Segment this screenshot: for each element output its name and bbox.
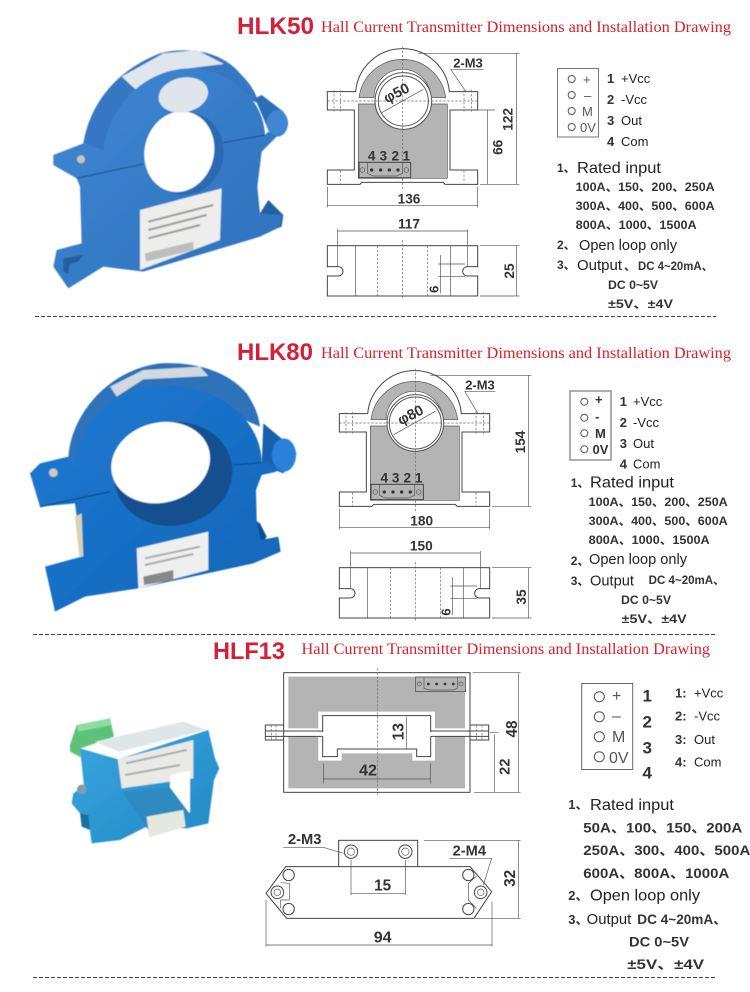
panel: HLK80: [30, 339, 731, 626]
spec text: HLF13: 3、: [568, 912, 589, 927]
spec text: HLK50: [557, 160, 715, 311]
pin list: HLK50: -Vcc: [621, 92, 648, 107]
spec text: HLK80: 100A、150、200、250A: [589, 495, 728, 509]
spec text: HLK50: 800A、1000、1500A: [576, 218, 697, 232]
drawing: HLK50 front and side views: 122: [500, 108, 515, 131]
heading: HLK50 subtitle: Hall Current Transmitter Dimensions and Installation Drawing: [321, 19, 731, 36]
drawing: HLK80 front and side views: 2: [404, 470, 412, 485]
pin box: HLK50: –: [584, 88, 592, 103]
pin list: HLF13: [675, 686, 724, 770]
heading: HLF13 model: HLF13: [213, 638, 285, 665]
pin box: HLK50: 0V: [580, 120, 596, 135]
drawing: HLK80 front and side views: 3: [392, 470, 400, 485]
pin box: HLK80: [570, 391, 611, 460]
drawing: HLF13 front and mounting views: 22: [497, 759, 513, 775]
drawing: HLK50 front and side views: 3: [380, 148, 388, 163]
pin list: HLF13: Com: [694, 755, 721, 770]
drawing: HLK50 front and side views: 1: [403, 148, 411, 163]
pin list: HLF13: 2:: [675, 709, 687, 724]
heading: HLK80 subtitle: Hall Current Transmitter Dimensions and Installation Drawing: [321, 345, 731, 362]
pin list: HLK50: 1: [607, 71, 614, 86]
spec text: HLF13: Output: [587, 912, 631, 928]
drawing: HLK50 front and side views: 117: [398, 217, 420, 232]
pin list: HLK50: 3: [607, 113, 614, 128]
spec text: HLK50: 300A、400、500、600A: [576, 199, 715, 213]
pin list: HLK80: 2: [620, 415, 627, 430]
drawing: HLK80 front and side views: 150: [410, 539, 433, 554]
pin list: HLK80: 1: [620, 394, 627, 409]
drawing: HLK50 front and side views: 136: [398, 192, 421, 207]
pin list: HLK50: 4: [607, 134, 615, 149]
drawing: HLK50 front and side views: 4: [368, 148, 376, 163]
spec text: HLK80: 3、: [571, 574, 589, 588]
spec text: HLK80: DC 4~20mA、: [649, 575, 725, 587]
pin list: HLF13: 3:: [675, 732, 687, 747]
panel: HLF13: [70, 638, 750, 972]
pin box: HLK80: 0V: [592, 442, 609, 457]
pin list: HLK80: -Vcc: [633, 415, 660, 430]
drawing: HLF13 front and mounting views: 42: [359, 763, 377, 780]
spec text: HLK50: 100A、150、200、250A: [576, 180, 715, 194]
drawing: HLF13 front and mounting views: [265, 668, 521, 947]
drawing: HLK50 front and side views: 2-M3: [453, 56, 483, 71]
heading: HLK50 model: HLK50: [237, 13, 314, 40]
spec text: HLK50: Rated input: [577, 160, 662, 177]
drawing: HLK50 front and side views: 2: [392, 148, 400, 163]
pin list: HLK80: +Vcc: [633, 394, 663, 409]
pin box: HLK80: +: [595, 392, 603, 407]
pin box: HLK80: -: [595, 409, 599, 424]
heading: HLK80 model: HLK80: [237, 339, 313, 366]
pin box: HLK50: M: [582, 104, 593, 119]
drawing: HLK80 front and side views: [339, 369, 531, 622]
drawing: HLK80 front and side views: 1: [415, 470, 423, 485]
pin list: HLK80: [620, 394, 663, 472]
spec text: HLK50: Output: [577, 257, 623, 274]
drawing: HLF13 front and mounting views: 32: [502, 870, 519, 887]
spec text: HLF13: ±5V、±4V: [627, 956, 705, 972]
drawing: HLK50 front and side views: 25: [502, 263, 517, 279]
drawing: HLK80 front and side views: 180: [410, 514, 433, 529]
drawing: HLK80 front and side views: 6: [438, 608, 453, 616]
pin list: HLF13: Out: [694, 732, 715, 747]
pin numbers: HLF13: 2: [642, 712, 652, 731]
spec text: HLF13: DC 4~20mA、: [637, 912, 727, 927]
spec text: HLF13: Rated input: [590, 797, 675, 814]
spec text: HLK80: 1、: [571, 476, 589, 490]
pin box: HLK50: +: [583, 72, 591, 87]
pin box: HLK80: M: [595, 426, 606, 441]
pin numbers: HLF13: 3: [642, 738, 652, 757]
pin list: HLK80: 3: [620, 436, 627, 451]
spec text: HLK50: DC 0~5V: [608, 280, 658, 292]
drawing: HLK50 front and side views: φ50: [381, 81, 412, 107]
spec text: HLK80: Output: [590, 573, 635, 590]
pin list: HLK50: 2: [607, 92, 614, 107]
pin list: HLK50: Out: [621, 113, 642, 128]
pin numbers: HLF13: [642, 687, 652, 782]
spec text: HLK50: 1、: [557, 161, 576, 175]
pin box: HLF13: 0V: [609, 750, 629, 767]
pin box: HLK50: [558, 68, 598, 137]
drawing: HLK80 front and side views: 4: [381, 470, 389, 485]
spec text: HLK50: 、: [624, 259, 636, 273]
pin list: HLK80: Out: [633, 436, 654, 451]
pin list: HLK50: +Vcc: [621, 71, 651, 86]
spec text: HLK50: DC 4~20mA、: [638, 261, 713, 273]
pin list: HLF13: +Vcc: [694, 686, 724, 700]
panel: HLK50: [53, 13, 731, 311]
spec text: HLK50: ±5V、±4V: [608, 297, 673, 311]
spec text: HLK80: Open loop only: [589, 552, 688, 568]
drawing: HLK80 front and side views: 2-M3: [465, 378, 495, 393]
pin box: HLF13: M: [612, 729, 625, 746]
pin list: HLK50: Com: [621, 134, 648, 149]
spec text: HLK80: 300A、400、500、600A: [589, 514, 728, 528]
spec text: HLK50: 3、: [557, 258, 576, 272]
pin list: HLF13: 1:: [675, 686, 687, 700]
drawing: HLK50 front and side views: [327, 47, 519, 300]
drawing: HLK80 front and side views: 154: [513, 430, 528, 453]
photo: HLF13 transmitter: [70, 718, 219, 843]
pin list: HLF13: 4:: [675, 755, 687, 770]
spec text: HLF13: Open loop only: [590, 888, 700, 905]
spec text: HLF13: [568, 797, 750, 972]
spec text: HLK80: 800A、1000、1500A: [589, 533, 710, 547]
drawing: HLF13 front and mounting views: 2-M3: [288, 832, 321, 848]
drawing: HLF13 front and mounting views: 94: [374, 929, 392, 946]
spec text: HLK50: 2、: [557, 238, 576, 252]
spec text: HLF13: 1、: [568, 797, 589, 812]
pin list: HLF13: -Vcc: [694, 709, 720, 724]
pin box: HLF13: –: [612, 708, 621, 725]
drawing: HLF13 front and mounting views: 15: [374, 878, 392, 895]
drawing: HLK80 front and side views: φ80: [395, 403, 426, 429]
pin list: HLK50: [607, 71, 651, 149]
pin box: HLF13: [582, 684, 633, 770]
spec text: HLF13: 2、: [568, 888, 589, 903]
spec text: HLK80: [571, 474, 728, 626]
spec text: HLF13: 50A、100、150、200A: [583, 819, 742, 835]
spec text: HLK80: DC 0~5V: [621, 595, 671, 607]
heading: HLF13 subtitle: Hall Current Transmitter Dimensions and Installation Drawing: [302, 641, 710, 658]
spec text: HLF13: 250A、300、400、500A: [583, 842, 750, 858]
drawing: HLF13 front and mounting views: 48: [504, 720, 521, 738]
pin list: HLK80: Com: [633, 456, 660, 472]
photo: HLK50 transmitter: [53, 50, 288, 288]
pin list: HLK80: 4: [620, 456, 628, 472]
spec text: HLK80: Rated input: [590, 474, 675, 491]
drawing: HLF13 front and mounting views: 2-M4: [453, 844, 487, 860]
photo: HLK80 transmitter: [30, 363, 297, 612]
spec text: HLK80: 2、: [571, 554, 589, 568]
pin box: HLF13: +: [612, 688, 621, 705]
pin numbers: HLF13: 1: [642, 687, 652, 706]
spec text: HLF13: 600A、800A、1000A: [583, 865, 729, 881]
spec text: HLF13: DC 0~5V: [629, 935, 689, 950]
spec text: HLK80: ±5V、±4V: [622, 612, 687, 626]
spec text: HLK50: Open loop only: [579, 238, 678, 254]
drawing: HLK80 front and side views: 35: [514, 589, 529, 605]
drawing: HLK50 front and side views: 6: [426, 286, 441, 293]
pin numbers: HLF13: 4: [642, 763, 652, 782]
drawing: HLF13 front and mounting views: 13: [390, 723, 407, 740]
drawing: HLK50 front and side views: 66: [491, 139, 506, 155]
